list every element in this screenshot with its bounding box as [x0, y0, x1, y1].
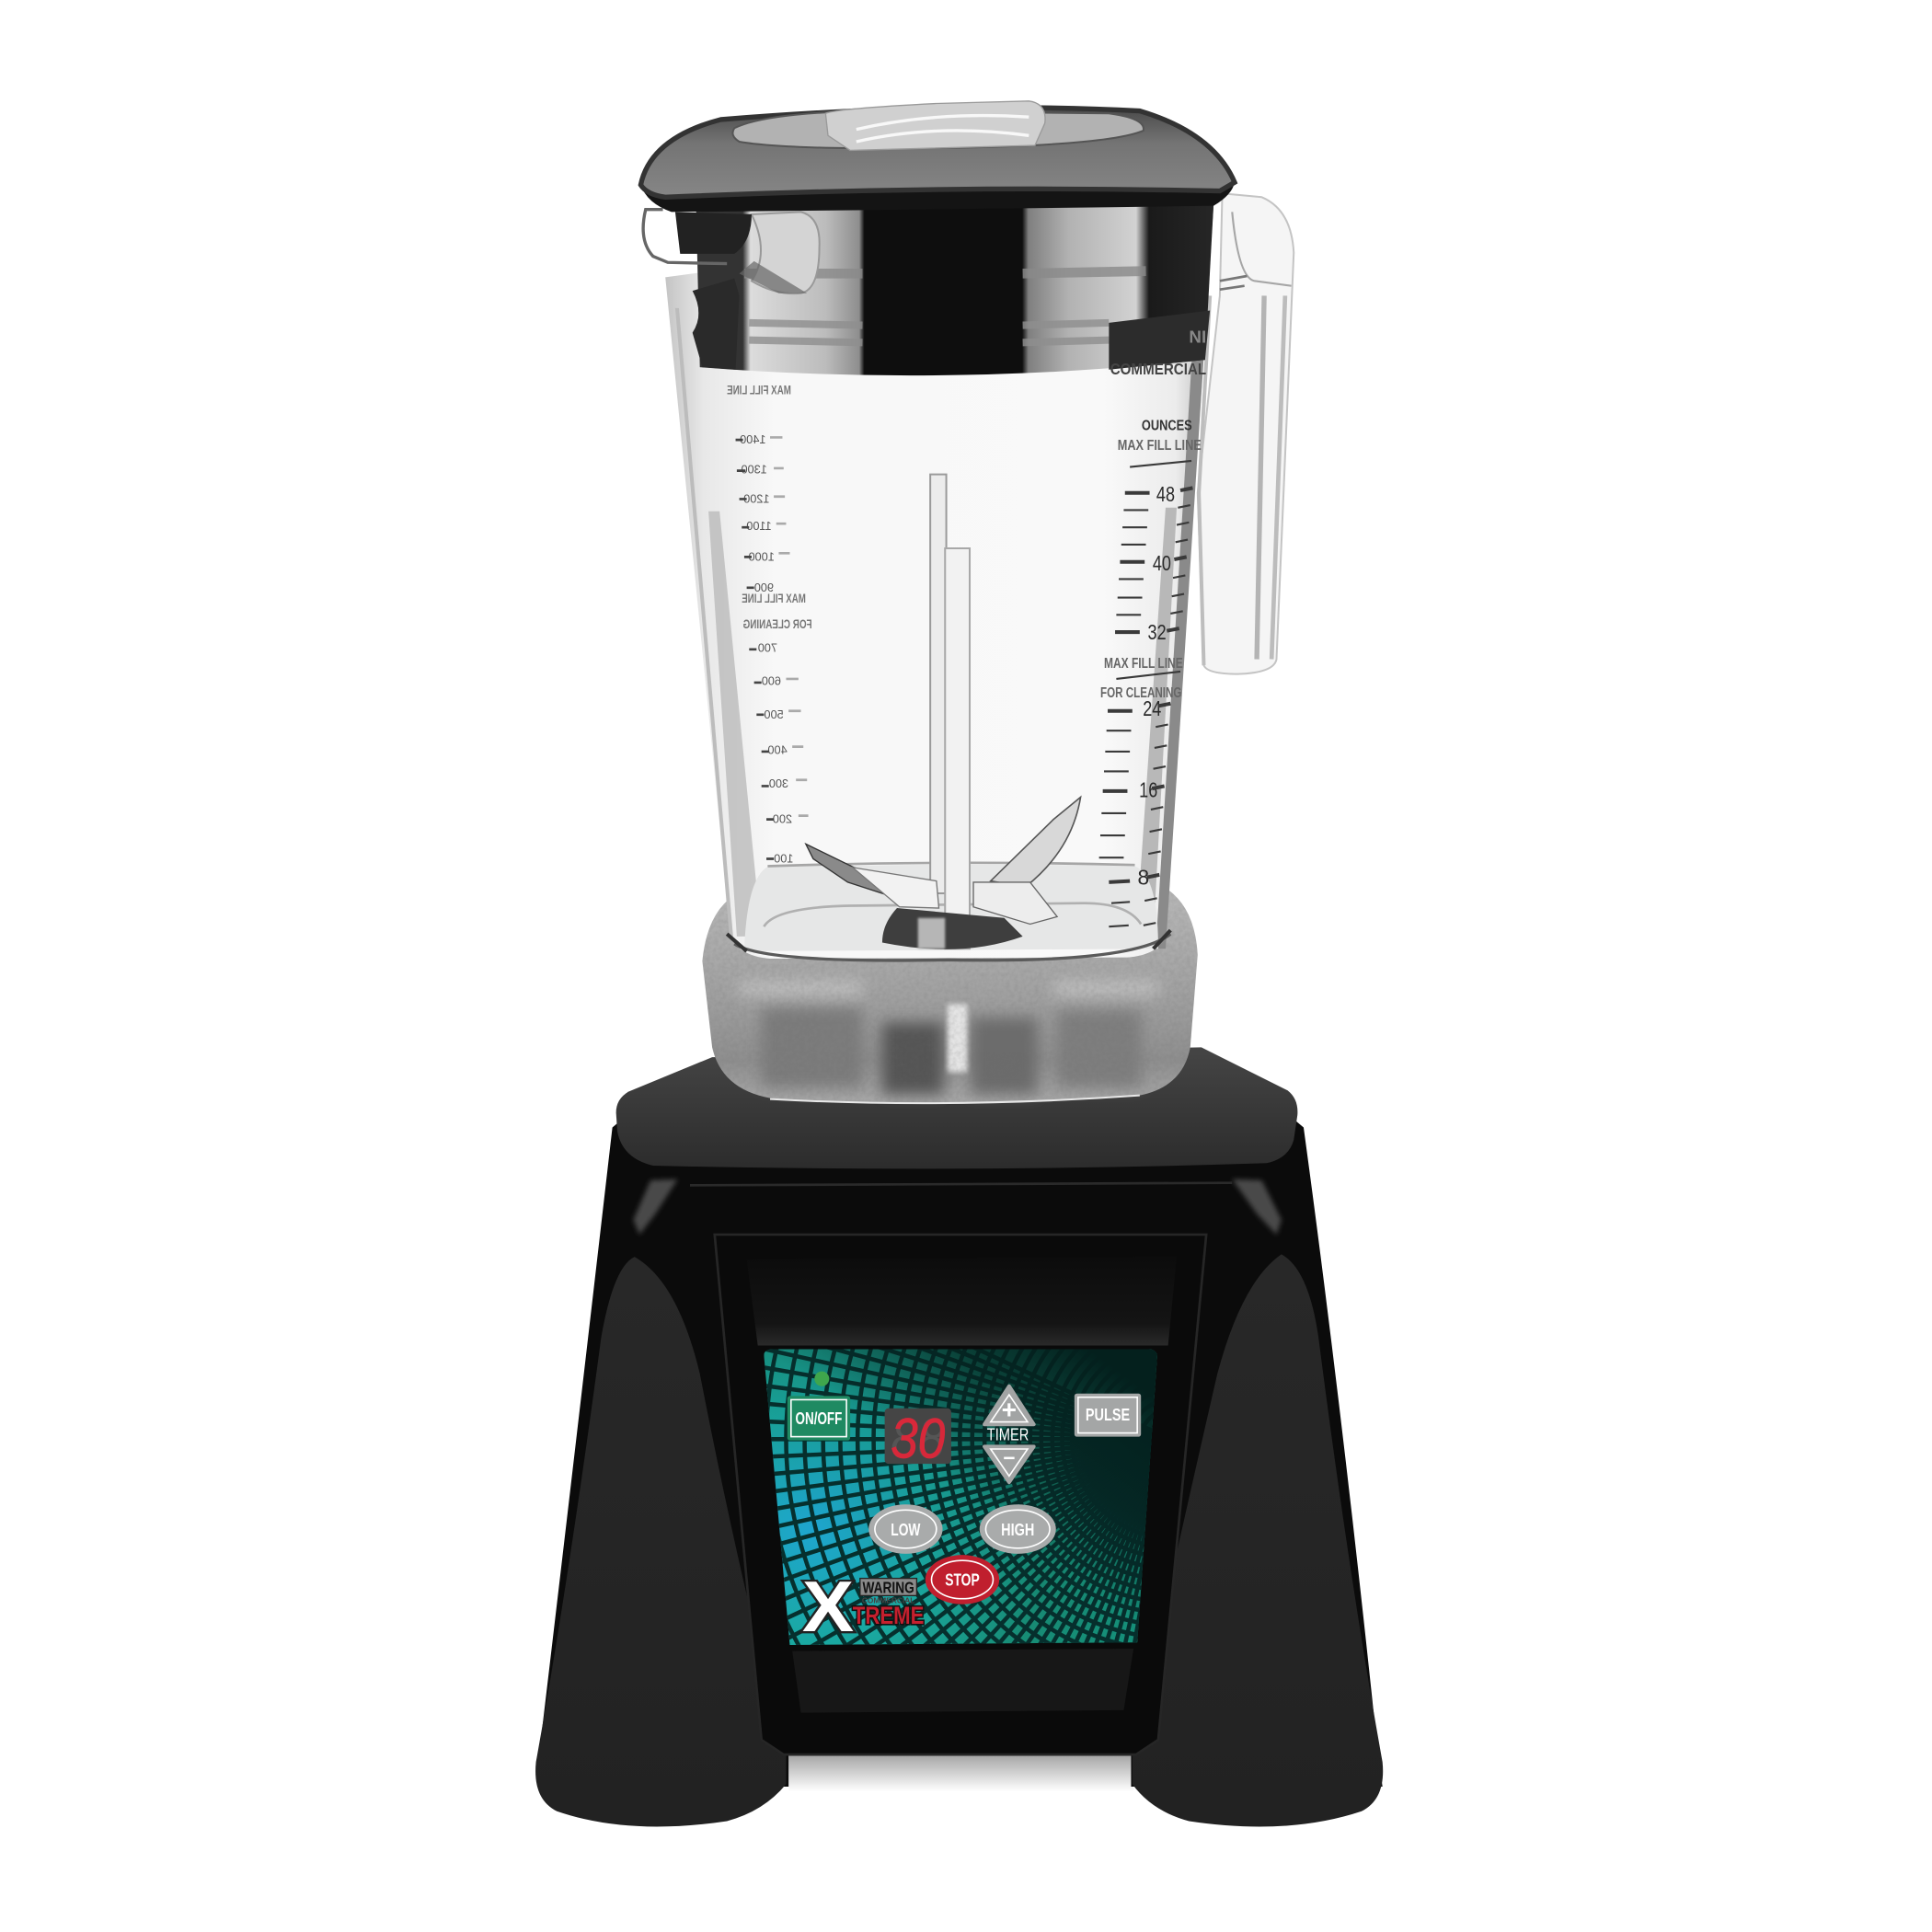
partial jar branding: COMMERCIAL	[1110, 360, 1206, 378]
left dark collar	[693, 279, 740, 370]
ground shadow	[788, 1754, 1133, 1791]
gloss highlights	[633, 1179, 1282, 1235]
HIGH button	[980, 1504, 1056, 1554]
ON/OFF button	[788, 1396, 850, 1441]
power LED	[814, 1372, 829, 1386]
ounce heading labels: FOR CLEANING	[1100, 684, 1181, 701]
rubber top pad	[616, 1047, 1297, 1168]
mirrored ml labels	[727, 384, 812, 631]
blade assembly	[806, 475, 1081, 949]
handle	[1198, 193, 1294, 674]
right foot panel	[1133, 1254, 1383, 1826]
lid lower rim	[640, 178, 1235, 212]
spout outline	[643, 210, 727, 264]
jar body	[665, 203, 1213, 960]
insert ridges	[744, 271, 1146, 342]
mirrored ml numbers: 1400	[740, 432, 765, 446]
frosted jar collar	[700, 887, 1200, 1109]
ounce numbers: 40	[1153, 551, 1171, 575]
upper recess	[747, 1257, 1177, 1345]
LOW button	[868, 1504, 943, 1554]
ounce numbers: 8	[1138, 866, 1149, 890]
lid opening	[732, 111, 1144, 148]
handle stripes	[1199, 212, 1292, 665]
right blade	[991, 798, 1081, 887]
ounce heading labels	[1100, 417, 1202, 701]
mirrored ml numbers: 700	[758, 640, 777, 654]
Waring Xtreme logo: X	[802, 1568, 854, 1647]
mirrored ml labels: MAX FILL LINE	[742, 592, 806, 605]
bottom glass well	[727, 863, 1170, 960]
blender illustration	[535, 100, 1384, 1827]
frosted texture	[707, 894, 1189, 1098]
spout dark throat	[675, 212, 752, 254]
lower right blade	[973, 882, 1057, 924]
base body	[537, 1109, 1383, 1787]
STOP button	[926, 1555, 999, 1604]
spindle sleeve	[945, 548, 970, 949]
lid top surface	[640, 108, 1235, 197]
timer buttons: −	[1003, 1445, 1016, 1469]
timer display: 30	[891, 1407, 945, 1470]
ml tick marks	[736, 437, 809, 858]
control screen	[764, 1349, 1157, 1645]
STOP button: STOP	[945, 1571, 980, 1590]
mirrored ml labels: FOR CLEANING	[743, 617, 812, 631]
motor base	[535, 1047, 1384, 1827]
hub highlight	[918, 918, 945, 949]
ounce numbers: 24	[1143, 696, 1161, 720]
LOW button: LOW	[891, 1521, 921, 1539]
hub cone	[882, 908, 1023, 949]
ounce tick marks	[1099, 461, 1192, 926]
left millilitre scale (seen through jar)	[727, 384, 812, 866]
mirrored ml labels: MAX FILL LINE	[727, 384, 791, 397]
ounce numbers	[1138, 482, 1175, 890]
spindle tube	[930, 475, 947, 893]
mirrored ml numbers: 1100	[746, 519, 772, 533]
collar shading blocks	[740, 982, 1158, 1094]
mirrored ml numbers: 1200	[743, 491, 769, 505]
timer buttons: +	[1002, 1396, 1017, 1424]
ounce numbers: 32	[1148, 620, 1167, 644]
mirrored ml numbers: 1300	[741, 462, 767, 476]
lid insert: NI	[1189, 327, 1206, 346]
mirrored ml numbers: 300	[769, 776, 788, 790]
left wall stripes	[708, 512, 762, 937]
Waring Xtreme logo: TREME	[853, 1602, 924, 1629]
timer display: 88	[891, 1407, 945, 1470]
PULSE button: PULSE	[1086, 1405, 1130, 1424]
left foot panel	[535, 1257, 786, 1826]
ounce heading labels: OUNCES	[1142, 417, 1192, 433]
Waring Xtreme logo: WARING	[862, 1579, 914, 1597]
mirrored ml numbers: 500	[764, 707, 784, 721]
ounce numbers: 16	[1139, 778, 1157, 802]
clear lid cap	[825, 101, 1045, 150]
mirrored ml numbers: 900	[754, 581, 774, 594]
timer buttons	[984, 1386, 1034, 1482]
HIGH button: HIGH	[1001, 1521, 1034, 1539]
Waring Xtreme logo: COMMERCIAL	[862, 1595, 915, 1604]
right dark block	[1109, 311, 1210, 370]
mirrored ml numbers: 600	[762, 674, 781, 688]
Waring Xtreme logo	[802, 1568, 924, 1647]
screen pattern	[765, 1349, 1157, 1645]
timer buttons: TIMER	[987, 1426, 1029, 1444]
mirrored ml numbers	[740, 432, 793, 865]
mirrored ml numbers: 1000	[749, 549, 775, 563]
right ounce scale	[1099, 417, 1202, 926]
ounce heading labels: MAX FILL LINE	[1104, 655, 1183, 672]
control panel frame	[715, 1235, 1206, 1754]
mirrored ml numbers: 400	[767, 743, 788, 757]
lid insert	[643, 203, 1213, 378]
ON/OFF button: ON/OFF	[796, 1409, 842, 1428]
ounce numbers: 48	[1156, 482, 1175, 506]
right wall stripes	[1156, 203, 1213, 949]
lower recess	[792, 1649, 1133, 1713]
spout glass	[752, 212, 820, 293]
PULSE button	[1075, 1394, 1141, 1437]
left blade	[806, 844, 939, 908]
ounce heading labels: MAX FILL LINE	[1118, 437, 1202, 454]
mirrored ml numbers: 100	[774, 851, 793, 865]
lid	[640, 101, 1235, 212]
mirrored ml numbers: 200	[773, 812, 792, 826]
